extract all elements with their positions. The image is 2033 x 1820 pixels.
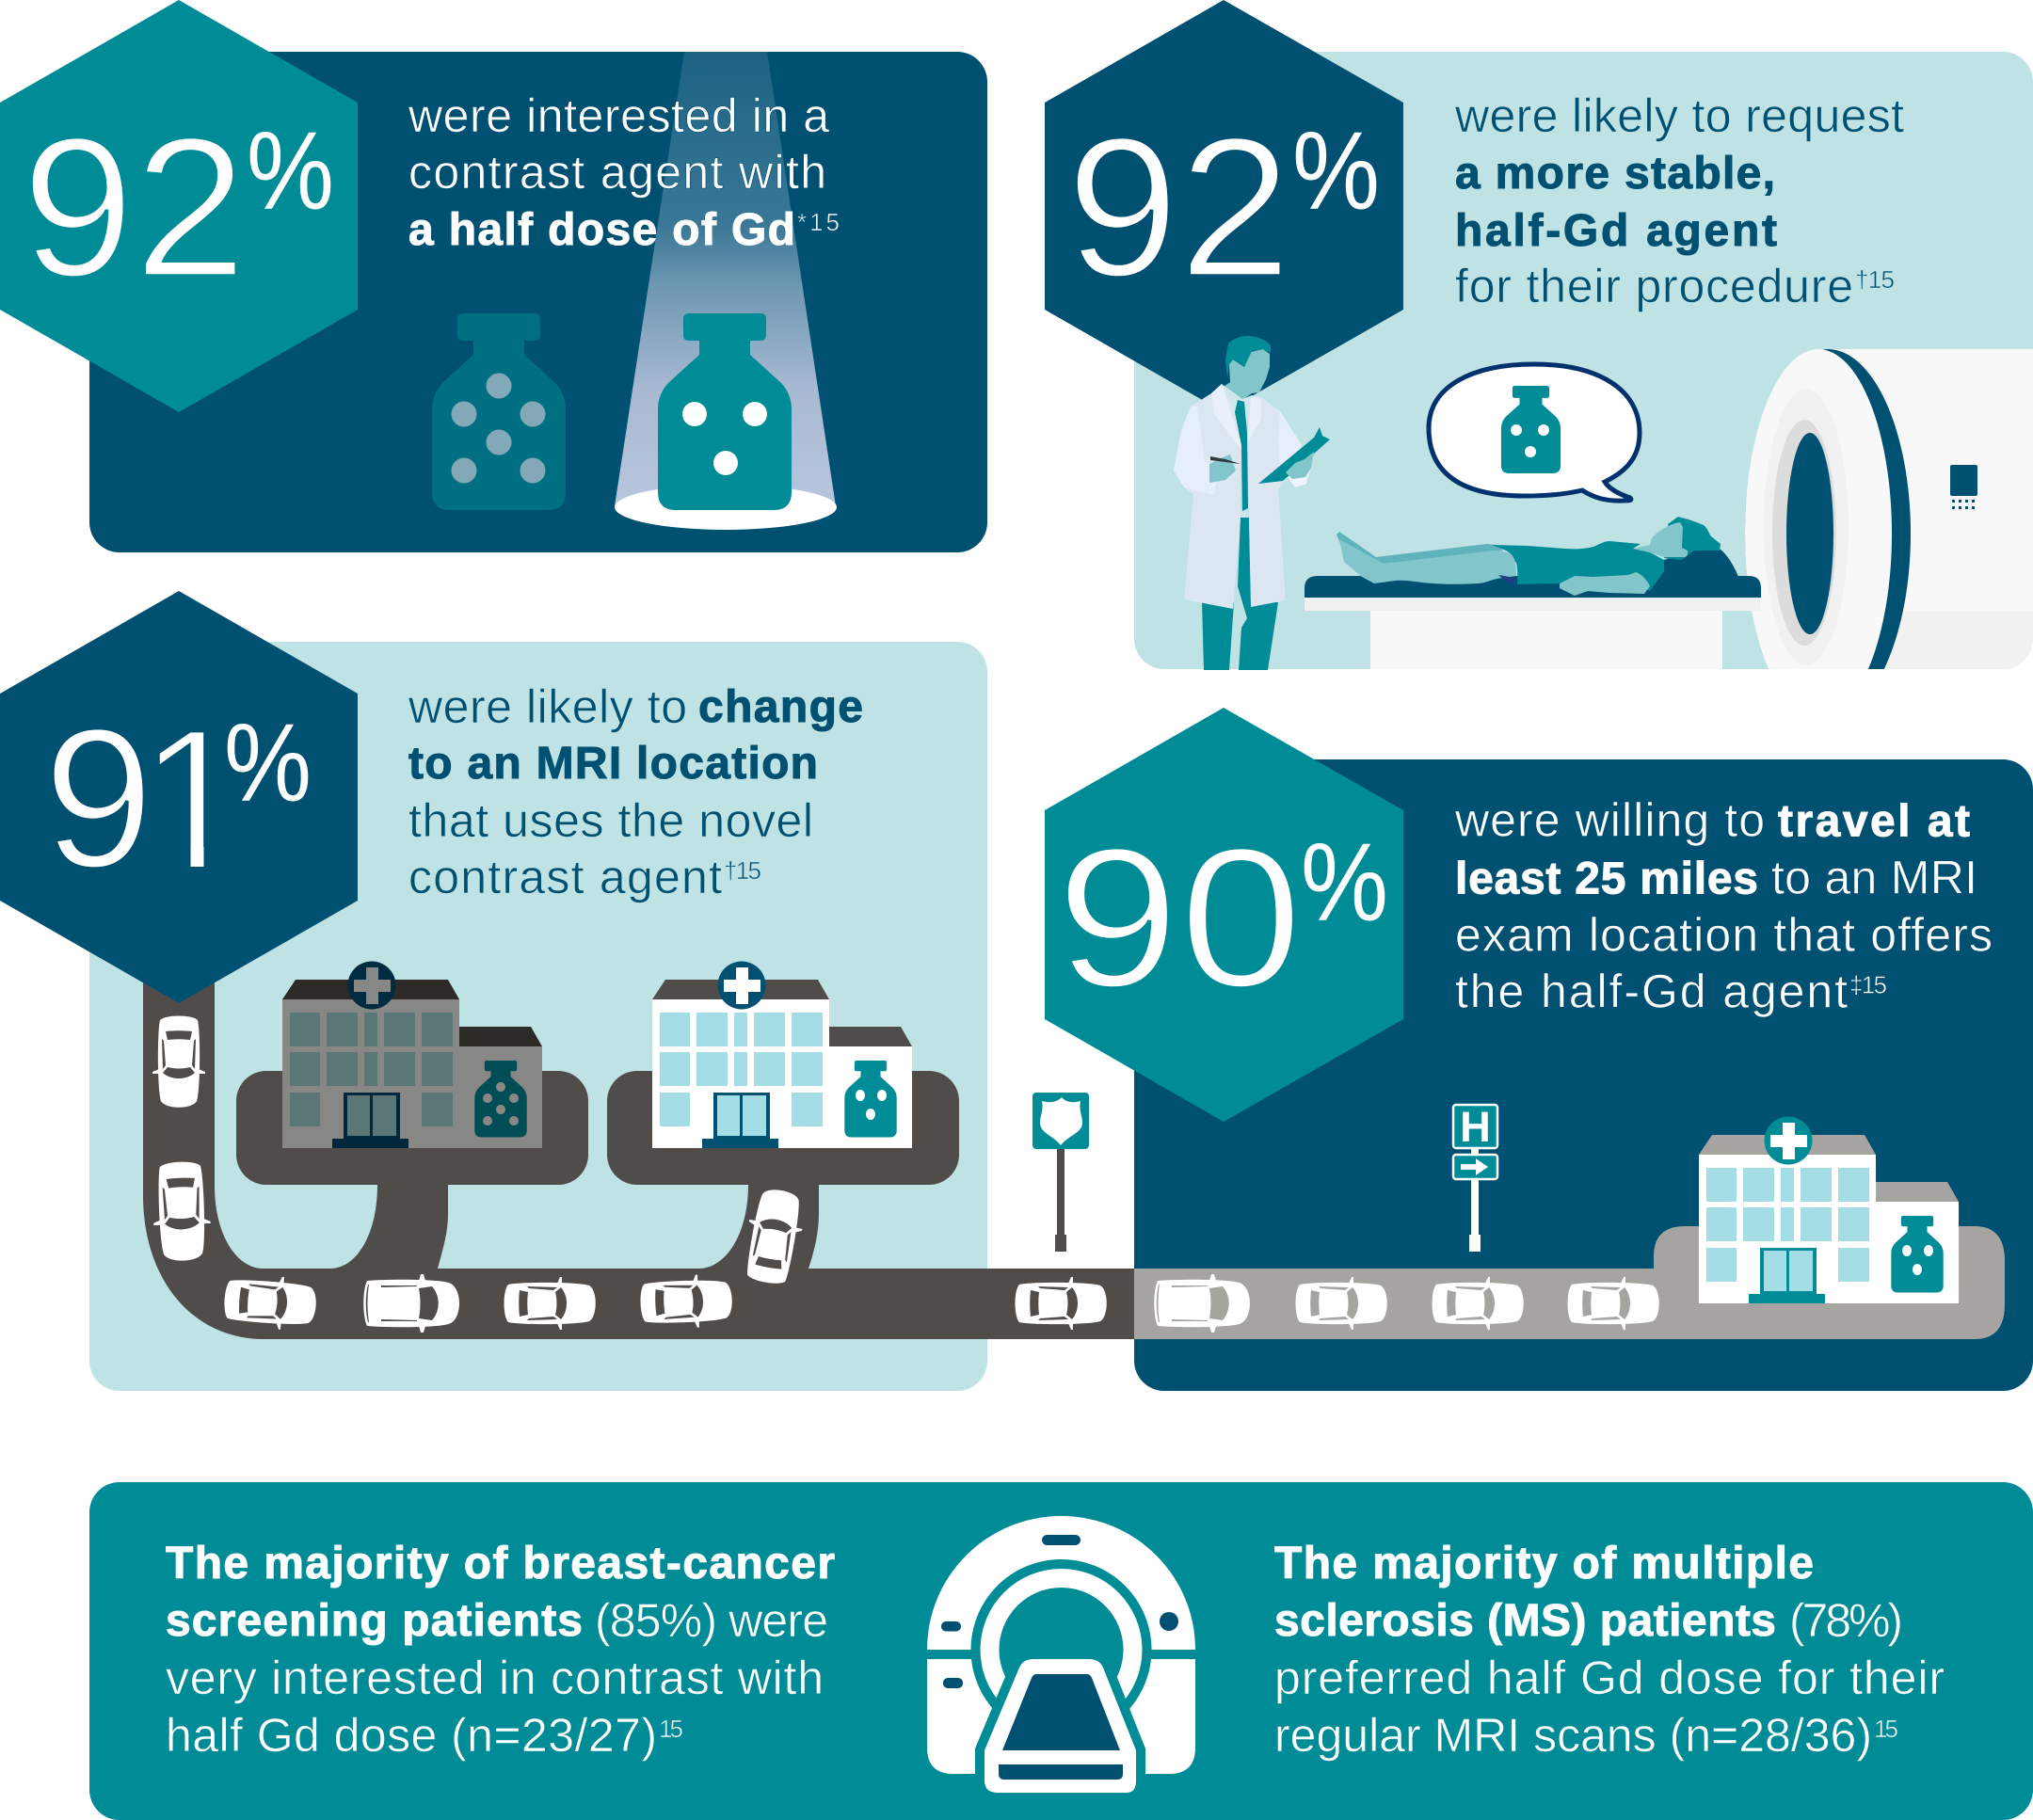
stat: 91% change (55, 724, 309, 868)
text: location statement: change (698, 682, 863, 732)
illustration: doctor with clipboard (1174, 336, 1330, 670)
hexagon: 90 percent teal (1045, 708, 1403, 1122)
text: interested statement: contrast agent with (408, 146, 826, 199)
text: multiple sclerosis patients: 15 (1874, 1715, 1898, 1743)
text: interested statement (408, 89, 840, 255)
hexagon: 92 percent navy (1045, 0, 1403, 412)
panel: change MRI location (89, 642, 987, 1391)
text: request statement: for their procedure (1455, 260, 1853, 312)
stat: 90% travel: % (1301, 821, 1388, 945)
stat: 92% interested: 92 (22, 96, 247, 318)
icon: MRI scanner (927, 1516, 1195, 1793)
text: interested statement: a half dose of Gd (408, 205, 795, 255)
stat: 91% change: % (224, 701, 312, 825)
text: breast-cancer screening patients: (85%) were (595, 1594, 828, 1647)
road network (143, 941, 2005, 1339)
text: travel statement (1454, 794, 1993, 1018)
text: multiple sclerosis patients (1274, 1539, 1945, 1762)
panel: travel further (1134, 759, 2033, 1391)
text: request statement: half-Gd agent (1455, 206, 1777, 256)
panel: patient subgroups (89, 1482, 2033, 1820)
text: travel statement: ‡15 (1849, 971, 1887, 999)
text: travel statement: were willing to (1454, 794, 1765, 847)
text: request statement: were likely to request (1454, 89, 1904, 142)
stat: 91% change: 9 (43, 687, 153, 909)
panel: interested in half dose (89, 52, 987, 552)
spotlight pool (615, 485, 837, 530)
stat: 92% request: 92 (1066, 96, 1291, 318)
text: travel statement: exam location that offers (1455, 909, 1993, 962)
text: breast-cancer screening patients (166, 1539, 835, 1762)
text: location statement: that uses the novel (408, 794, 813, 847)
text: interested statement: *15 (797, 208, 840, 236)
stat: 92% interested: % (247, 109, 334, 233)
panel: request stable agent (1134, 52, 2033, 718)
text: multiple sclerosis patients: The majority of multiple (1274, 1539, 1814, 1589)
text: multiple sclerosis patients: sclerosis (MS) patients (1274, 1596, 1776, 1646)
scanner table (1305, 576, 1761, 669)
road sign: hospital direction (1453, 1103, 1497, 1252)
illustration: hospital with half-dose agent (652, 962, 912, 1148)
text: travel statement: to an MRI (1771, 851, 1977, 903)
text: breast-cancer screening patients: screening patients (166, 1596, 583, 1646)
hexagon: 92 percent teal (0, 0, 358, 412)
text: multiple sclerosis patients: (78%) (1789, 1594, 1903, 1647)
text: location statement: †15 (724, 856, 761, 885)
text: location statement: contrast agent (408, 851, 722, 903)
icon: standard dose vial (432, 313, 566, 510)
text: request statement: a more stable, (1455, 149, 1775, 199)
stat: 90% travel: 90 (1056, 806, 1303, 1029)
hexagon: 91 percent navy (0, 591, 358, 1003)
cars on road (152, 1016, 1659, 1333)
text: breast-cancer screening patients: half Gd dose (n=23/27) (166, 1709, 657, 1762)
spotlight beam (615, 52, 836, 506)
text: multiple sclerosis patients: preferred half Gd dose for their (1274, 1652, 1945, 1704)
text: travel statement: travel at (1778, 796, 1970, 847)
text: location statement (408, 680, 863, 903)
icon: half dose vial (658, 313, 792, 510)
text: breast-cancer screening patients: 15 (659, 1715, 683, 1743)
road sign: hospital direction: H (1460, 1103, 1491, 1151)
stat: 91% change: 1 (138, 687, 248, 909)
text: multiple sclerosis patients: regular MRI scans (n=28/36) (1274, 1709, 1872, 1762)
text: travel statement: least 25 miles (1455, 854, 1758, 903)
speech bubble with vial (1429, 364, 1640, 501)
text: breast-cancer screening patients: The majority of breast-cancer (166, 1539, 835, 1589)
text: location statement: to an MRI location (408, 739, 818, 789)
stat: 92% request: % (1292, 109, 1380, 233)
illustration: hospital without half-dose agent (282, 962, 542, 1148)
text: travel statement: the half-Gd agent (1455, 966, 1848, 1018)
stat: 90% travel (1056, 806, 1388, 1029)
text: breast-cancer screening patients: very interested in contrast with (166, 1652, 824, 1704)
road sign: highway shield (1033, 1093, 1089, 1252)
MRI scanner (1745, 349, 2033, 669)
text: request statement (1454, 89, 1904, 312)
patient lying on table (1337, 517, 1738, 596)
text: location statement: were likely to (408, 680, 687, 733)
text: request statement: †15 (1855, 265, 1895, 294)
illustration: destination hospital (1699, 1116, 1959, 1303)
text: interested statement: were interested in a (408, 89, 829, 142)
